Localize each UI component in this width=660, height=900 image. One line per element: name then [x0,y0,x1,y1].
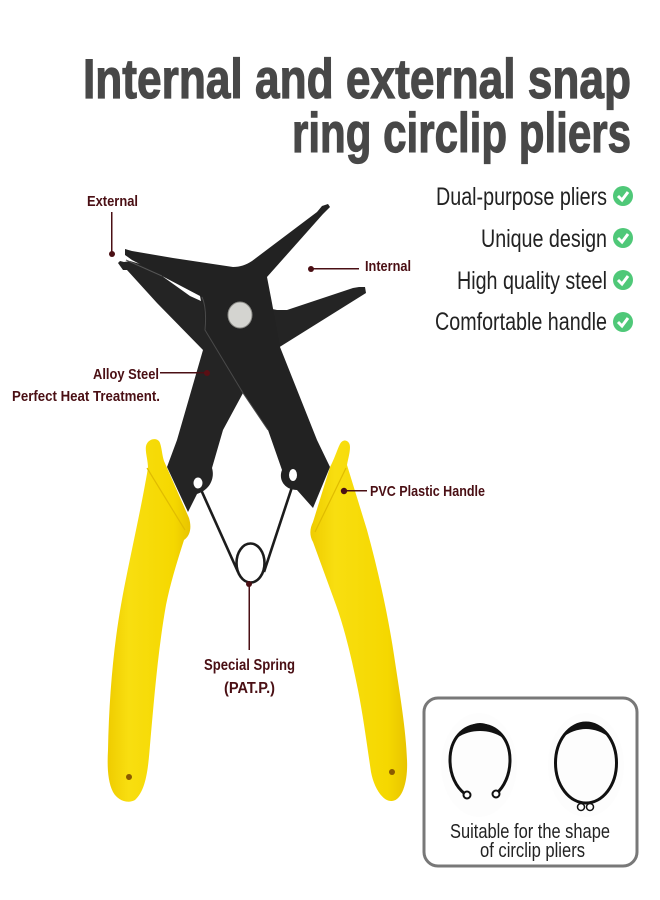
right handle [310,440,407,801]
feature: high quality steel: High quality steel [457,267,607,295]
callout: special spring [204,581,295,697]
handle end holes [126,769,395,780]
panel caption [450,821,610,862]
callout: alloy steel: Perfect Heat Treatment. [12,388,160,405]
pliers illustration [108,204,407,802]
callout: alloy steel [12,366,210,405]
callout: pvc handle: PVC Plastic Handle [370,483,485,500]
panel caption: of circlip pliers [480,840,585,862]
feature: comfortable handle: Comfortable handle [435,308,607,336]
callout: special spring: (PAT.P.) [224,680,275,697]
callout: internal [308,258,411,275]
pivot rivet [228,302,252,328]
callout: internal: Internal [365,258,411,275]
jaw gap [162,276,201,301]
handle collars [147,468,346,532]
icon: external circlip [548,713,624,817]
callout: special spring: Special Spring [204,657,295,674]
callout: external: External [87,193,138,210]
callout: pvc handle [341,483,485,500]
panel: circlip shapes [424,698,637,866]
callout: alloy steel: Alloy Steel [93,366,159,383]
holes [194,478,202,488]
panel caption: Suitable for the shape [450,821,610,843]
icon: internal circlip [441,713,517,817]
spring [198,478,295,582]
left handle [108,439,190,802]
feature list [435,183,633,336]
title [83,47,631,164]
feature: unique design: Unique design [481,225,607,253]
back arm [118,261,366,512]
callout: external [87,193,138,257]
feature: dual-purpose pliers: Dual-purpose pliers [436,183,607,211]
jaw parting line [126,260,162,276]
front arm [125,204,330,508]
arm edge highlight [202,297,268,430]
